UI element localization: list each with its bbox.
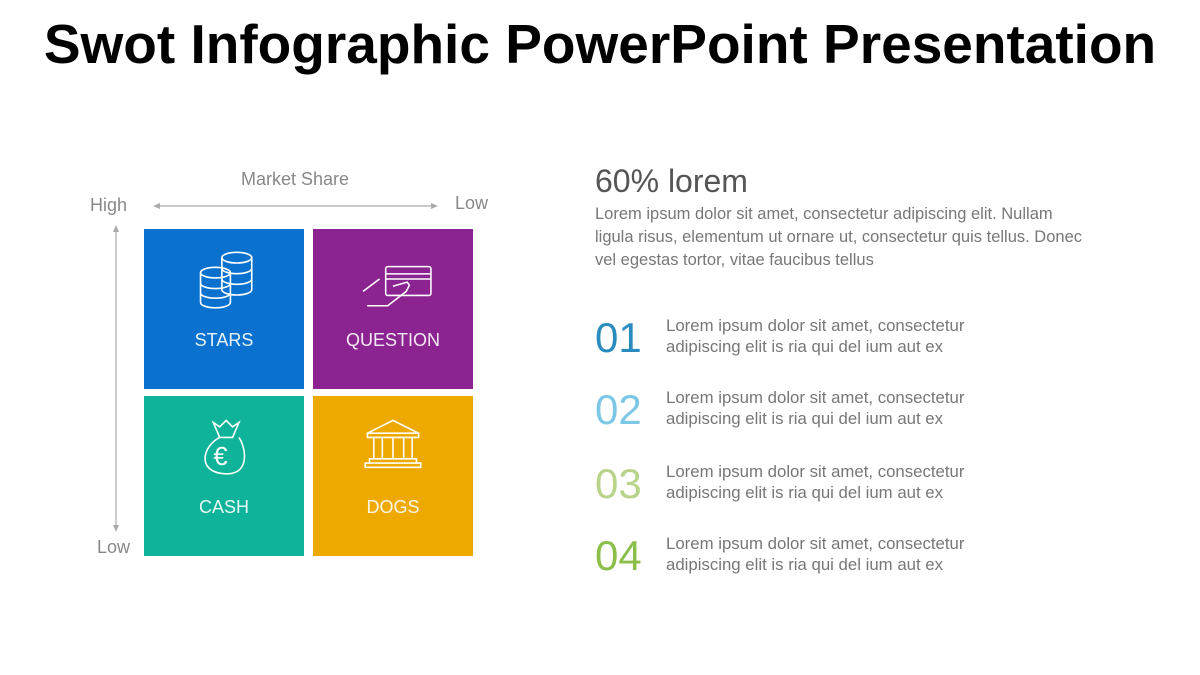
heading: 60% lorem: 60% lorem <box>595 163 748 199</box>
panel: stars: STARS <box>195 330 253 350</box>
item 03: adipiscing elit is ria qui del ium aut ex <box>666 483 943 502</box>
item 01: adipiscing elit is ria qui del ium aut ex <box>666 337 943 356</box>
item 04: 04 <box>595 532 642 579</box>
item 02: adipiscing elit is ria qui del ium aut ex <box>666 409 943 428</box>
panel: stars <box>144 229 304 389</box>
panel: question <box>313 229 473 389</box>
panel: question: QUESTION <box>346 330 440 350</box>
axis label: low right: Low <box>455 193 488 213</box>
item 04: adipiscing elit is ria qui del ium aut ex <box>666 555 943 574</box>
item 04: Lorem ipsum dolor sit amet, consectetur <box>666 534 964 553</box>
axis label: market share: Market Share <box>241 169 349 189</box>
panel: dogs <box>313 396 473 556</box>
panel: dogs: DOGS <box>366 497 420 517</box>
item 02: Lorem ipsum dolor sit amet, consectetur <box>666 388 964 407</box>
axis arrows <box>113 203 438 532</box>
icon: hand with card <box>362 266 432 306</box>
text block: intro: ligula risus, elementum ut ornare ut, consectetur quis tellus. Donec <box>595 228 1082 246</box>
item 01 <box>595 314 964 361</box>
axis label: low bottom: Low <box>97 537 130 557</box>
item 03: Lorem ipsum dolor sit amet, consectetur <box>666 462 964 481</box>
item 02 <box>595 386 964 433</box>
icon: money bag <box>204 419 246 475</box>
title: Swot Infographic PowerPoint Presentation <box>44 13 1156 75</box>
panel: cash <box>144 396 304 556</box>
item 04 <box>595 532 964 579</box>
item 03 <box>595 460 964 507</box>
item 02: 02 <box>595 386 642 433</box>
text block: intro <box>595 205 1082 269</box>
icon: bank <box>364 420 422 468</box>
text block: intro: vel egestas tortor, vitae faucibus tellus <box>595 251 874 269</box>
item 03: 03 <box>595 460 642 507</box>
text block: intro: Lorem ipsum dolor sit amet, consectetur adipiscing elit. Nullam <box>595 205 1053 223</box>
axis label: high: High <box>90 195 127 215</box>
panel: cash: CASH <box>199 497 249 517</box>
icon: money bag: € <box>213 443 228 471</box>
icon: coins <box>200 252 253 309</box>
item 01: 01 <box>595 314 642 361</box>
item 01: Lorem ipsum dolor sit amet, consectetur <box>666 316 964 335</box>
